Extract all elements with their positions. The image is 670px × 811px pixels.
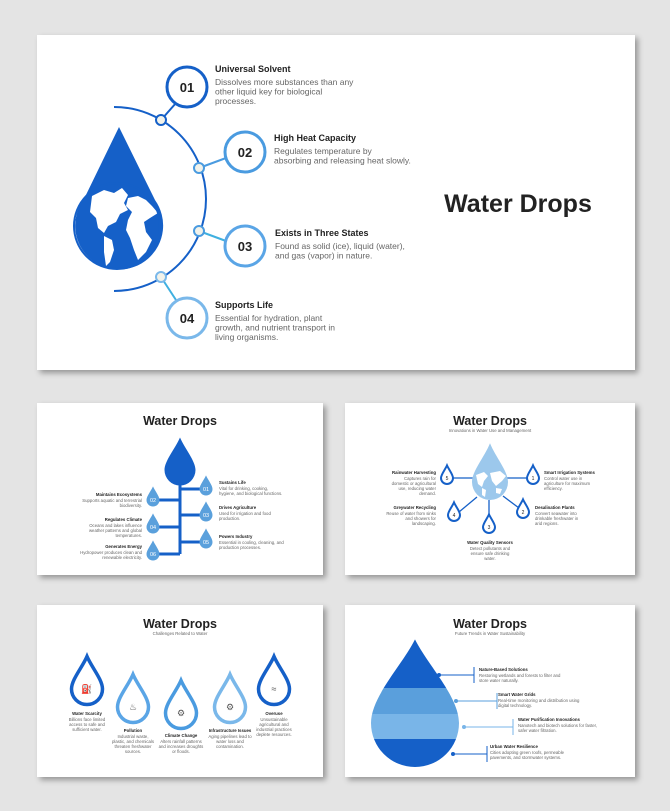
panel: innovations: Rainwater Harvesting — [392, 470, 436, 475]
panel: innovations: Water Quality Sensors — [467, 540, 513, 545]
panel: innovations: Reuse of water from sinks — [386, 511, 436, 516]
panel: future trends: pavements, and stormwater systems. — [490, 755, 561, 760]
panel: challenges: Alters rainfall patterns — [160, 739, 202, 744]
panel: uses of water: Drives Agriculture — [219, 505, 257, 510]
panel: challenges: Overuse — [265, 711, 283, 716]
panel: uses of water: 02 — [150, 498, 156, 504]
panel: challenges: or floods. — [172, 749, 190, 754]
panel: future trends: Nanotech and biotech solutions for faster, — [518, 723, 597, 728]
panel: future trends: Nature-Based Solutions — [479, 667, 528, 672]
panel: challenges: ⛽ — [81, 683, 93, 694]
panel: uses of water: 03 — [203, 513, 209, 519]
panel: challenges: access to safe and — [69, 722, 106, 727]
panel: uses of water: biodiversity. — [120, 503, 142, 508]
panel: future trends: Smart Water Grids — [498, 692, 536, 697]
item 03: 03 — [238, 239, 252, 254]
panel: challenges: contamination. — [216, 744, 244, 749]
panel: uses of water: Essential in cooling, cleaning, and — [219, 540, 284, 545]
panel: innovations: Water Drops — [453, 414, 527, 428]
panel: future trends: safer water filtration. — [518, 728, 557, 733]
panel: uses of water: hygiene, and biological functions. — [219, 491, 282, 496]
panel: uses of water: Water Drops — [143, 414, 217, 428]
panel: future trends: store water naturally. — [479, 678, 519, 683]
panel: challenges: Industrial waste, — [117, 734, 149, 739]
panel: challenges: sources. — [125, 749, 141, 754]
panel: challenges: deplete resources. — [256, 732, 292, 737]
panel: innovations: Captures rain for — [404, 476, 437, 481]
panel: challenges: ⚙ — [177, 708, 185, 718]
item 02: High Heat Capacity — [274, 133, 356, 143]
panel: innovations — [345, 403, 635, 575]
panel: innovations: 3 — [488, 525, 491, 531]
panel: uses of water: weather patterns and global — [89, 528, 142, 533]
item 03: Exists in Three States — [275, 228, 369, 238]
panel: innovations: 2 — [522, 510, 525, 516]
panel: innovations: Smart Irrigation Systems — [544, 470, 595, 475]
panel: challenges: plastic, and chemicals — [112, 739, 154, 744]
panel: challenges: agricultural and — [259, 722, 289, 727]
panel: uses of water: renewable electricity. — [102, 555, 142, 560]
panel: innovations: drinkable freshwater in — [535, 516, 579, 521]
item 02 — [194, 132, 411, 173]
panel: innovations: demand. — [419, 491, 436, 496]
panel: innovations: 5 — [446, 476, 449, 482]
item 04: living organisms. — [215, 332, 278, 342]
panel: future trends: Real-time monitoring and distribution using — [498, 698, 580, 703]
panel: innovations: domestic or agricultural — [392, 481, 436, 486]
panel: innovations: Innovations in Water Use and Management — [449, 428, 532, 433]
panel: challenges: Pollution — [124, 728, 143, 733]
panel: challenges: Water Scarcity — [72, 711, 102, 716]
item 04: growth, and nutrient transport in — [215, 322, 335, 332]
icon: globe drop — [74, 127, 163, 269]
panel: future trends: Future Trends in Water Sustainability — [455, 631, 526, 636]
panel: challenges: and increases droughts — [159, 744, 203, 749]
panel: challenges: water loss and — [216, 739, 244, 744]
panel: main slide — [37, 35, 635, 370]
panel: future trends — [345, 605, 635, 777]
panel: uses of water: production processes. — [219, 545, 261, 550]
item 01: Dissolves more substances than any — [215, 77, 354, 87]
panel: innovations: landscaping. — [412, 521, 436, 526]
panel: uses of water: Sustains Life — [219, 480, 246, 485]
item 02: absorbing and releasing heat slowly. — [274, 156, 411, 166]
panel: uses of water: Maintains Ecosystems — [96, 492, 143, 497]
panel: uses of water: Supports aquatic and terrestrial — [82, 498, 142, 503]
panel: challenges: Infrastructure Issues — [209, 728, 252, 733]
panel: challenges — [37, 605, 323, 777]
panel: uses of water: 01 — [203, 487, 209, 493]
panel: challenges: industrial practices — [256, 727, 292, 732]
panel: future trends: Urban Water Resilience — [490, 744, 538, 749]
panel: uses of water: 05 — [203, 540, 209, 546]
item 01 — [156, 64, 354, 125]
panel: uses of water: 04 — [150, 525, 156, 531]
panel: uses of water: Regulates Climate — [105, 517, 143, 522]
panel: innovations: use, reducing water — [398, 486, 437, 491]
item 02: 02 — [238, 145, 252, 160]
item 04: Essential for hydration, plant — [215, 313, 323, 323]
panel: uses of water: Powers Industry — [219, 534, 253, 539]
panel: innovations: Detect pollutants and — [470, 546, 511, 551]
panel: innovations: arid regions. — [535, 521, 559, 526]
item 02: Regulates temperature by — [274, 146, 373, 156]
arc — [114, 107, 206, 291]
panel: innovations: 1 — [532, 476, 535, 482]
panel: future trends: digital technology. — [498, 703, 532, 708]
panel: innovations: Control water use in — [544, 476, 583, 481]
item 01: processes. — [215, 96, 256, 106]
panel: challenges: Unsustainable — [260, 717, 288, 722]
title: Water Drops — [444, 190, 592, 218]
panel: uses of water: Used for irrigation and food — [219, 511, 271, 516]
panel: innovations: 4 — [453, 513, 456, 519]
panel: challenges: Water Drops — [143, 617, 217, 631]
panel: future trends: Cities adopting green roofs, permeable — [490, 750, 565, 755]
item 03: and gas (vapor) in nature. — [275, 250, 372, 260]
panel: challenges: Billions face limited — [69, 717, 106, 722]
panel: uses of water: production. — [219, 516, 240, 521]
panel: future trends: Restoring wetlands and forests to filter and — [479, 673, 561, 678]
panel: challenges: sufficient water. — [72, 727, 102, 732]
panel: challenges: ⚙ — [226, 702, 234, 712]
panel: uses of water: Hydropower produces clean and — [80, 550, 143, 555]
panel: challenges: ♨ — [129, 702, 137, 712]
panel: innovations: Convert seawater into — [535, 511, 577, 516]
item 04: Supports Life — [215, 300, 273, 310]
item 01: other liquid key for biological — [215, 86, 322, 96]
panel: innovations: Desalination Plants — [535, 505, 575, 510]
panel: uses of water: Oceans and lakes influence — [89, 523, 143, 528]
item 03 — [194, 226, 405, 266]
panel: innovations: agriculture for maximum — [544, 481, 591, 486]
tree stem — [153, 480, 206, 554]
item 04: 04 — [180, 311, 195, 326]
panel: innovations: efficiency. — [544, 486, 563, 491]
panel: uses of water: Generates Energy — [105, 544, 143, 549]
panel: challenges: Aging pipelines lead to — [208, 734, 252, 739]
panel: innovations: Greywater Recycling — [393, 505, 436, 510]
panel: innovations: water. — [484, 556, 496, 561]
panel: future trends: Water Purification Innovations — [518, 717, 581, 722]
panel: innovations: ensure safe drinking — [471, 551, 510, 556]
panel: challenges: Challenges Related to Water — [153, 631, 208, 636]
item 01: 01 — [180, 80, 194, 95]
panel: challenges: threaten freshwater — [114, 744, 152, 749]
layered drop — [371, 640, 459, 767]
panel: future trends: Water Drops — [453, 617, 527, 631]
panel: uses of water: temperatures. — [115, 533, 142, 538]
panel: uses of water: 06 — [150, 552, 156, 558]
panel: uses of water — [37, 403, 323, 575]
item 01: Universal Solvent — [215, 64, 291, 74]
panel: uses of water: Vital for drinking, cooking, — [219, 486, 268, 491]
panel: challenges: ≈ — [272, 684, 277, 694]
panel: innovations: and showers for — [405, 516, 437, 521]
item 03: Found as solid (ice), liquid (water), — [275, 241, 405, 251]
item 04 — [156, 272, 335, 342]
panel: challenges: Climate Change — [165, 733, 198, 738]
